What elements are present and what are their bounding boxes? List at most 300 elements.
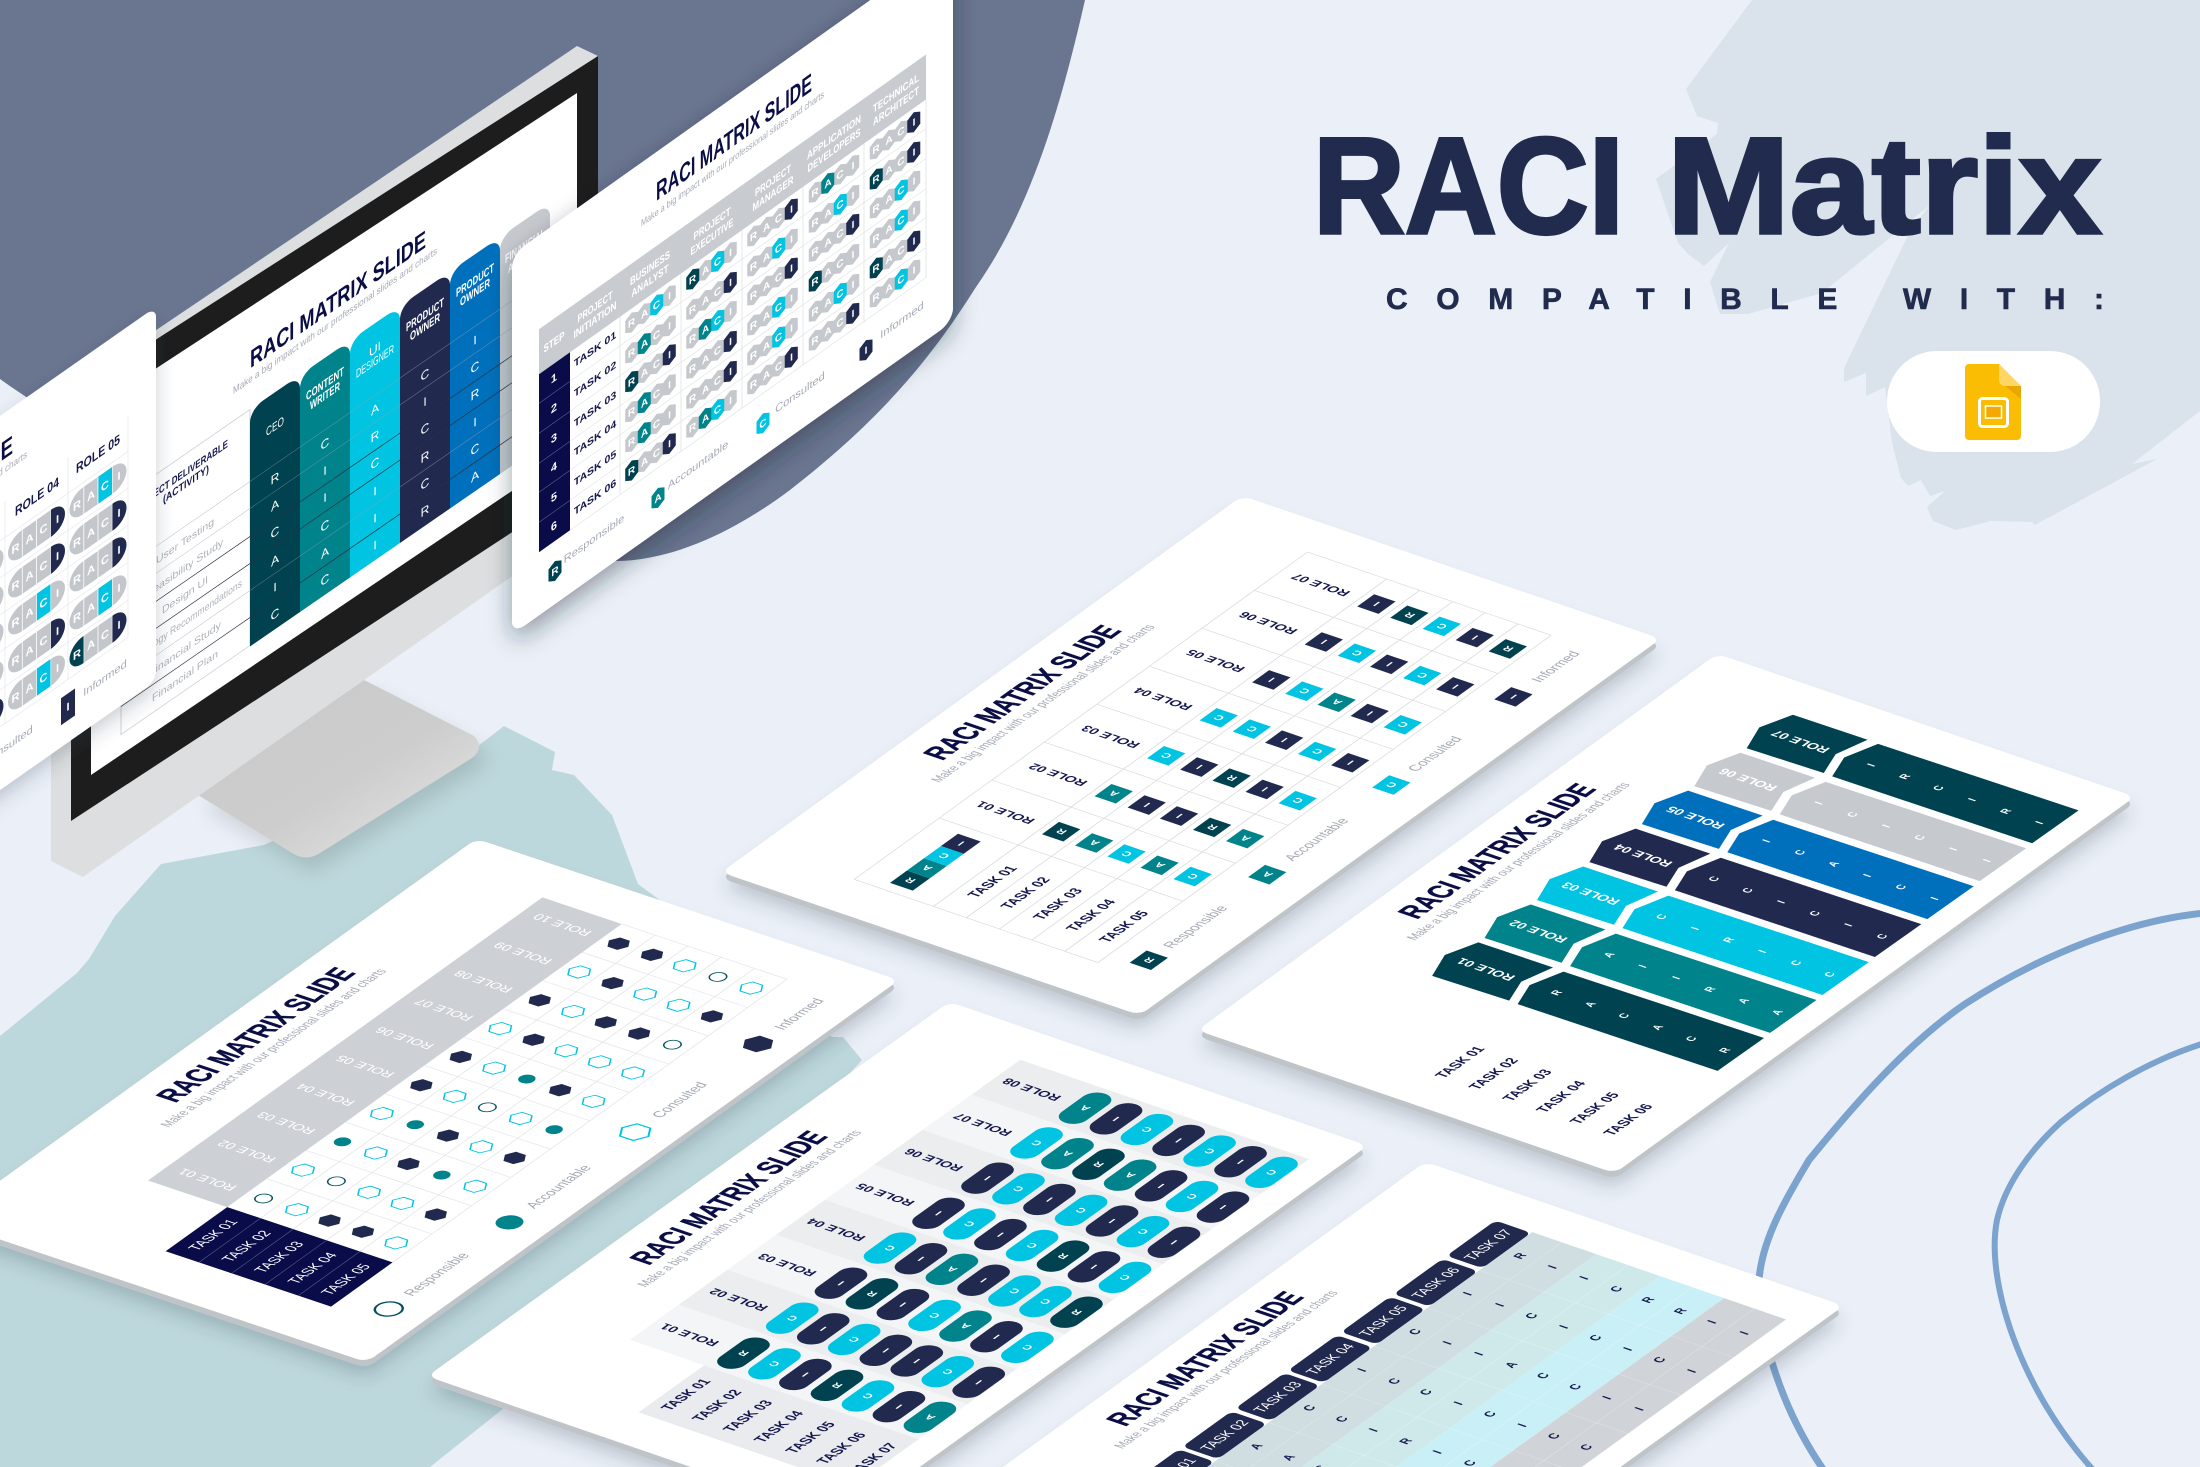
project executive column: RACI xyxy=(689,336,732,377)
column: CEO: C xyxy=(271,604,280,624)
legend: Informed xyxy=(1528,649,1584,684)
role header band: ROLE 05 xyxy=(332,1053,398,1080)
card body xyxy=(427,1002,1368,1467)
card contents xyxy=(481,1031,1309,1467)
header band: MANAGER xyxy=(752,173,794,214)
project manager column: RACI xyxy=(750,263,793,304)
header band: PROJECT xyxy=(694,204,731,243)
card shadow and thickness xyxy=(427,1008,1368,1467)
application developers column: RACI xyxy=(811,219,854,260)
role 05 bar xyxy=(1631,785,1974,921)
column: product owner blue xyxy=(450,237,500,508)
legend: Informed xyxy=(770,996,827,1031)
project executive column xyxy=(686,238,737,442)
slide title: RACI MATRIX SLIDE xyxy=(656,68,812,207)
card shadow and body xyxy=(512,0,953,634)
main title xyxy=(1313,110,2101,263)
task labels: TASK 02 xyxy=(689,1388,746,1423)
task labels xyxy=(1432,1044,1657,1137)
card shadow and thickness xyxy=(0,845,899,1368)
column: product owner: C xyxy=(421,474,430,493)
column: product owner: PRODUCT xyxy=(406,295,444,335)
column: CEO: CEO xyxy=(266,413,284,439)
project manager column: RACI xyxy=(750,293,793,334)
cells role 02: AIIRA xyxy=(1106,789,1254,842)
task header band xyxy=(166,1207,393,1307)
column: financial: FINANCIAL xyxy=(505,225,545,266)
header band: DEVELOPERS xyxy=(807,125,860,175)
column: UI designer: I xyxy=(373,483,377,499)
step column: 4 xyxy=(551,459,557,476)
column: product owner blue: OWNER xyxy=(460,275,490,309)
column: content writer xyxy=(300,340,350,612)
role 06 bar xyxy=(1683,747,2026,883)
activity table: PROJECT DELIVERABLE xyxy=(132,437,228,516)
slide card: hexagon and circle symbol matrix xyxy=(0,839,899,1368)
role labels xyxy=(656,1076,1065,1348)
role 07 bar: IRCIRI xyxy=(1864,761,2049,827)
task header band: TASK 04 xyxy=(283,1250,341,1286)
task labels: TASK 05 xyxy=(574,447,617,489)
task tabs: TASK 07 xyxy=(1461,1228,1516,1262)
raci key strip: I xyxy=(956,840,967,847)
task labels xyxy=(964,864,1153,944)
column: content writer: C xyxy=(321,434,330,453)
legend: Responsible xyxy=(1160,904,1231,950)
google slides badge xyxy=(1887,351,2100,452)
task labels: TASK 02 xyxy=(997,875,1054,911)
task labels: TASK 03 xyxy=(1029,886,1086,922)
legend xyxy=(1130,648,1586,970)
role 02 bar xyxy=(1474,899,1816,1035)
legend: Responsible xyxy=(399,1251,473,1298)
activity table: (ACTIVITY) xyxy=(163,462,209,506)
column: financial: ANALYST xyxy=(508,239,542,276)
pills role 02: CICIICI xyxy=(784,1313,985,1385)
teal brush stroke bottom left xyxy=(0,726,862,1467)
symbols role 01 xyxy=(250,1192,412,1251)
card shadow and thickness xyxy=(904,1168,1844,1467)
pills role 08: AICICIC xyxy=(1077,1103,1280,1176)
task labels: TASK 05 xyxy=(1096,909,1153,944)
column: UI designer: A xyxy=(371,400,379,419)
column: CEO xyxy=(250,375,300,646)
card contents xyxy=(0,350,128,893)
role labels xyxy=(15,431,120,520)
column: content writer: CONTENT xyxy=(306,364,344,404)
desktop monitor xyxy=(51,46,598,877)
business analyst column: RACI xyxy=(628,320,671,361)
cells role 06: ICICI xyxy=(1319,638,1462,690)
monitor black bezel xyxy=(71,56,598,821)
step column xyxy=(539,352,570,552)
task tabs: TASK 03 xyxy=(1250,1380,1305,1414)
legend xyxy=(0,652,127,780)
role 07 bar xyxy=(1736,710,2079,845)
pills role 03 xyxy=(808,1265,1060,1366)
technical architect column: RACI xyxy=(872,206,915,247)
role 04 column: RACI xyxy=(12,586,59,632)
role 03 bar xyxy=(1526,861,1869,997)
role 01 bar xyxy=(1421,937,1764,1073)
role 06 bar: ICICII xyxy=(1811,799,1997,865)
role labels xyxy=(972,571,1353,826)
column: content writer: I xyxy=(323,463,327,479)
cells role 07: IRCIR xyxy=(1372,600,1517,653)
column: product owner: R xyxy=(421,501,430,520)
column: product owner blue: PRODUCT xyxy=(456,260,494,300)
symbols role 06 xyxy=(445,1049,610,1109)
task labels: TASK 04 xyxy=(1533,1079,1590,1114)
column: product owner: I xyxy=(423,394,427,410)
slide subtitle: Make a big impact with our professional slides and charts xyxy=(633,1128,866,1289)
symbols role 03 xyxy=(329,1135,491,1194)
column: product owner: R xyxy=(421,447,430,466)
pills role 01: RCIRCIA xyxy=(736,1348,938,1421)
legend: Consulted xyxy=(647,1080,711,1119)
step column: 3 xyxy=(551,430,557,447)
activity table: Financial Study xyxy=(149,619,221,680)
project manager column: RACI xyxy=(750,204,793,245)
task labels: TASK 02 xyxy=(1465,1056,1522,1091)
project manager column xyxy=(747,195,798,398)
header band: BUSINESS xyxy=(630,247,670,288)
application developers column: RACI xyxy=(811,190,854,231)
business analyst column xyxy=(625,281,676,485)
task labels: TASK 06 xyxy=(813,1430,870,1466)
column: product owner blue: C xyxy=(471,357,480,377)
subtitle: compatible with: COMPATIBLE WITH: xyxy=(1386,283,2104,316)
monitor slide subtitle: Make a big impact with our professional slides and charts xyxy=(233,245,437,397)
task labels xyxy=(574,328,617,518)
task labels: TASK 03 xyxy=(719,1398,777,1434)
header band: INITIATION xyxy=(574,298,617,341)
legend: Informed xyxy=(83,656,127,699)
task labels: TASK 04 xyxy=(1063,897,1120,933)
card body xyxy=(1197,654,2135,1173)
role labels: ROLE 04 xyxy=(15,474,59,520)
card shadow and thickness xyxy=(721,502,1661,1021)
monitor slide title: RACI MATRIX SLIDE xyxy=(250,225,426,374)
legend: I xyxy=(865,345,867,357)
letters by task: CIIACCII xyxy=(1406,1327,1650,1414)
business analyst column: RACI xyxy=(628,349,671,390)
role labels: ROLE 06 xyxy=(901,1146,966,1173)
grid lines xyxy=(570,100,926,530)
task labels: TASK 01 xyxy=(658,1377,715,1412)
technical architect column: RACI xyxy=(872,147,915,188)
activity table: User Testing xyxy=(156,515,214,567)
grid xyxy=(854,552,1551,963)
dark slate circle backdrop xyxy=(0,0,1085,561)
project executive column: RACI xyxy=(689,247,732,288)
role labels: ROLE 07 xyxy=(1288,572,1353,598)
slide subtitle: Make a big impact with our professional slides and charts xyxy=(641,89,824,230)
column: product owner blue: A xyxy=(471,467,479,486)
legend: Consulted xyxy=(775,369,825,416)
table row lines xyxy=(121,295,520,707)
cells role 05 xyxy=(1252,670,1422,735)
role 03 column, cropped xyxy=(0,543,4,759)
role 04 column: RACI xyxy=(12,624,59,670)
role 06 bar: ROLE 06 xyxy=(1715,766,1781,793)
task tabs xyxy=(1130,1221,1531,1467)
task tabs: TASK 05 xyxy=(1356,1303,1411,1338)
role labels: ROLE 05 xyxy=(1183,648,1248,674)
role labels: ROLE 02 xyxy=(706,1286,771,1313)
card contents xyxy=(996,1191,1786,1467)
task labels: TASK 01 xyxy=(964,864,1021,899)
card contents xyxy=(539,0,926,592)
column: UI designer: I xyxy=(373,537,377,553)
legend: Accountable xyxy=(1281,816,1352,862)
role header band: ROLE 06 xyxy=(372,1025,437,1051)
role labels: ROLE 04 xyxy=(802,1216,869,1243)
column: CEO: A xyxy=(271,551,279,570)
role 05 bar: ROLE 05 xyxy=(1663,804,1728,831)
task header band: TASK 01 xyxy=(184,1217,241,1252)
slide subtitle: Make a big impact with our professional slides and charts xyxy=(1403,781,1634,942)
project manager column: RACI xyxy=(750,234,793,275)
symbols role 08 xyxy=(524,993,686,1052)
task labels: TASK 03 xyxy=(1499,1067,1556,1103)
application developers column: RACI xyxy=(811,160,854,201)
role labels: ROLE 05 xyxy=(852,1181,918,1208)
legend: Responsible xyxy=(564,511,624,566)
role header band xyxy=(148,897,622,1207)
legend: R xyxy=(1141,955,1158,964)
pills role 06: ICICICI xyxy=(982,1174,1180,1245)
column: CEO: R xyxy=(271,468,280,488)
project manager column: RACI xyxy=(750,323,793,364)
pills role 03: IRICAIC xyxy=(836,1279,1036,1351)
column: content writer: I xyxy=(323,490,327,506)
task labels: TASK 03 xyxy=(574,388,617,430)
symbols role 07 xyxy=(484,1021,649,1081)
role labels: ROLE 04 xyxy=(1129,685,1196,712)
step column: 1 xyxy=(551,370,557,387)
header band: ARCHITECT xyxy=(873,83,919,129)
monitor screen xyxy=(91,93,577,775)
role header band: ROLE 08 xyxy=(451,968,516,995)
legend: Informed xyxy=(880,298,924,342)
activity table: Financial Plan xyxy=(152,648,218,705)
header band: TECHNICAL xyxy=(873,70,919,116)
application developers column xyxy=(809,151,859,355)
task labels: TASK 05 xyxy=(1566,1090,1623,1126)
role labels: ROLE 05 xyxy=(76,431,120,477)
column: content writer: C xyxy=(321,570,330,589)
role header band: ROLE 03 xyxy=(253,1110,319,1136)
pills role 01 xyxy=(711,1334,962,1436)
task tabs: TASK 06 xyxy=(1408,1266,1464,1300)
column: UI designer: R xyxy=(371,426,380,446)
pills role 07: CARAICI xyxy=(1029,1138,1229,1210)
role 01 bar: RACACR xyxy=(1549,989,1734,1055)
header band: ANALYST xyxy=(632,261,669,300)
role 05 column: RACI xyxy=(73,506,121,552)
raci key strip: A xyxy=(919,863,936,872)
role 05 column xyxy=(70,457,126,673)
role header band: ROLE 10 xyxy=(529,912,595,938)
slide card: square cells matrix xyxy=(721,496,1661,1021)
column: product owner: OWNER xyxy=(410,309,440,344)
card body xyxy=(721,496,1661,1015)
role labels: ROLE 07 xyxy=(950,1111,1015,1138)
column: content writer: WRITER xyxy=(310,378,340,413)
column: product owner: C xyxy=(421,419,430,438)
column: UI designer: I xyxy=(373,510,377,526)
pills role 04 xyxy=(857,1229,1109,1331)
raci key strip: R xyxy=(902,875,919,884)
card shadow and thickness xyxy=(1197,660,2135,1179)
application developers column: RACI xyxy=(811,249,854,290)
letters by task: IICICICI xyxy=(1458,1289,1702,1376)
column: CEO: C xyxy=(271,522,280,542)
cells role 04: CCICI xyxy=(1211,713,1357,766)
role 02 bar: AIIRAA xyxy=(1602,951,1787,1017)
pills role 05 xyxy=(906,1195,1157,1296)
role 05 column: RACI xyxy=(73,469,121,515)
task labels: TASK 06 xyxy=(1600,1102,1657,1137)
task labels: TASK 05 xyxy=(782,1420,839,1455)
slide title: RACI MATRIX SLIDE xyxy=(916,622,1130,763)
slide title: RACI MATRIX SLIDE xyxy=(1391,780,1604,922)
symbols role 04 xyxy=(366,1106,531,1166)
step column: 2 xyxy=(551,400,557,417)
role labels: ROLE 03 xyxy=(754,1252,820,1278)
legend: C xyxy=(759,416,767,432)
header band xyxy=(539,55,926,374)
role 05 bar: ICAICI xyxy=(1759,837,1944,903)
project executive column: RACI xyxy=(689,366,732,407)
technical architect column: RACI xyxy=(872,265,915,306)
column: product owner blue: I xyxy=(473,332,477,348)
column: product owner: C xyxy=(421,365,430,384)
letters by task xyxy=(1194,1251,1755,1467)
cells role 03: CIRIC xyxy=(1159,751,1307,804)
role header band: ROLE 01 xyxy=(174,1166,240,1193)
slide title: RACI MATRIX SLIDE xyxy=(622,1128,836,1268)
role header band: ROLE 04 xyxy=(293,1082,358,1108)
letters by task: RIICRRII xyxy=(1511,1251,1755,1338)
slide card: chevron bars matrix xyxy=(1197,654,2135,1179)
column: content writer: C xyxy=(321,516,330,535)
grid lines xyxy=(0,415,128,769)
monitor stand xyxy=(198,680,487,873)
raci key strip xyxy=(890,834,981,891)
project executive column: RACI xyxy=(689,306,732,347)
role 04 column: RACI xyxy=(12,512,59,558)
blue hand-drawn curves xyxy=(1759,913,2200,1467)
role 04 column: RACI xyxy=(12,661,59,707)
role 04 bar xyxy=(1578,823,1921,959)
task header band: TASK 05 xyxy=(317,1262,374,1297)
role 02 bar: ROLE 02 xyxy=(1505,918,1571,945)
legend: A xyxy=(654,491,662,507)
slide card: tinted bands matrix xyxy=(904,1162,1844,1467)
pills role 04: CIAICCR xyxy=(882,1243,1085,1316)
role labels: ROLE 01 xyxy=(657,1321,722,1348)
role 04 column xyxy=(8,500,65,716)
role labels: ROLE 02 xyxy=(1025,761,1091,788)
floating slide: hexagon RACI table xyxy=(512,0,953,634)
column: UI designer: DESIGNER xyxy=(356,341,394,381)
role 01 bar: ROLE 01 xyxy=(1453,956,1518,983)
role 04 bar: ROLE 04 xyxy=(1609,842,1676,869)
task header band: TASK 02 xyxy=(217,1229,275,1264)
legend: C xyxy=(1384,780,1400,789)
legend: I xyxy=(1509,693,1520,700)
cells role 07 xyxy=(1357,594,1527,659)
application developers column: RACI xyxy=(811,308,854,349)
column: product owner xyxy=(400,271,450,543)
role labels: ROLE 03 xyxy=(1078,723,1143,750)
legend: I xyxy=(66,699,70,714)
column: UI designer: C xyxy=(371,453,380,473)
task labels xyxy=(658,1377,901,1467)
project executive column: RACI xyxy=(689,277,732,318)
floating slide: pill RACI table, cropped at left edge xyxy=(0,307,156,1000)
role header band: ROLE 02 xyxy=(214,1138,280,1165)
project executive column: RACI xyxy=(689,395,732,436)
role header band: ROLE 07 xyxy=(411,997,477,1023)
grid xyxy=(227,924,787,1262)
pale grey brush stroke behind title xyxy=(1656,0,2200,530)
technical architect column: RACI xyxy=(872,176,915,217)
task header band: TASK 03 xyxy=(250,1239,308,1274)
header band: APPLICATION xyxy=(807,112,861,163)
role column bands xyxy=(564,1060,1309,1467)
header band: PROJECT xyxy=(578,288,613,326)
task labels: TASK 01 xyxy=(1432,1044,1489,1080)
role 05 column: RACI xyxy=(73,581,121,627)
legend: Consulted xyxy=(1404,735,1466,773)
business analyst column: RACI xyxy=(628,379,671,420)
cells role 06 xyxy=(1305,632,1474,697)
activity table xyxy=(121,410,250,735)
column: UI designer: UI xyxy=(369,338,381,360)
legend xyxy=(367,995,833,1319)
technical architect column: RACI xyxy=(872,117,915,158)
column: product owner blue: R xyxy=(471,384,480,404)
slide subtitle: Make a big impact with our professional slides and charts xyxy=(1110,1288,1342,1450)
header band: STEP xyxy=(544,328,565,356)
task labels: TASK 02 xyxy=(574,358,617,400)
card body xyxy=(0,839,899,1362)
role 07 bar: ROLE 07 xyxy=(1767,728,1833,755)
slide on monitor screen xyxy=(121,139,550,736)
business analyst column: RACI xyxy=(628,290,671,331)
slide subtitle: Make a big impact with our professional slides and charts xyxy=(927,622,1159,784)
legend: R xyxy=(551,564,559,580)
symbols role 05 xyxy=(405,1077,567,1136)
header band: EXECUTIVE xyxy=(691,215,734,258)
slide title: RACI MATRIX SLIDE xyxy=(149,964,364,1106)
column: CEO: I xyxy=(273,579,277,595)
role labels: ROLE 01 xyxy=(972,799,1038,826)
role 05 column: RACI xyxy=(73,618,121,664)
column: content writer: A xyxy=(321,543,329,562)
role 05 column: RACI xyxy=(73,543,121,589)
business analyst column: RACI xyxy=(628,438,671,479)
slide card: pill cells matrix xyxy=(427,1002,1368,1467)
technical architect column: RACI xyxy=(872,236,915,277)
symbols role 09 xyxy=(563,964,728,1024)
legend xyxy=(548,298,924,586)
column: product owner blue: C xyxy=(471,439,480,459)
role header band: ROLE 09 xyxy=(490,940,556,966)
